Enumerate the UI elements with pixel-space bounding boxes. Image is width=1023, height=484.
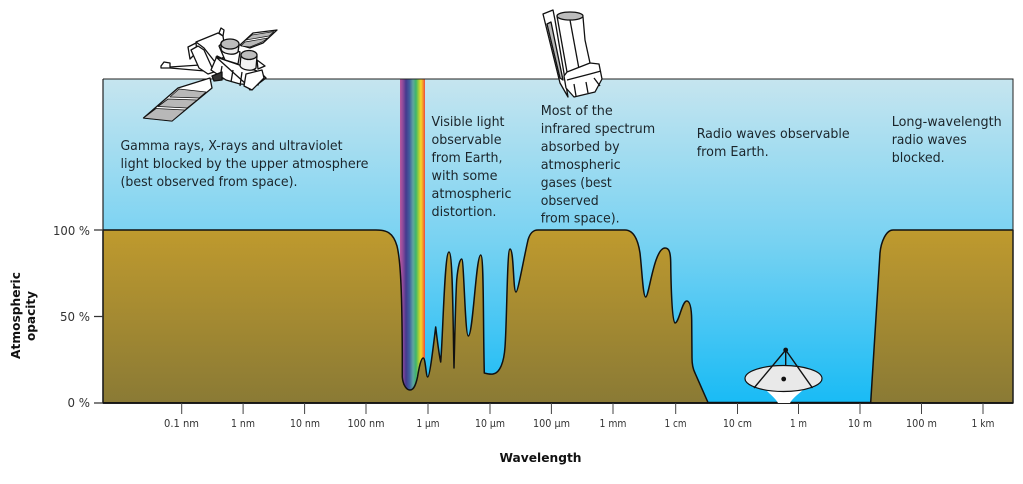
text: infrared spectrum: infrared spectrum [541,121,655,137]
x axis ticks and wavelength labels: 1 nm [231,417,255,430]
sky background panel [103,79,1013,403]
text: infrared spectrum: from space). [541,210,620,226]
text: infrared spectrum: absorbed by [541,139,620,155]
y axis title: Atmospheric [8,272,23,359]
x axis ticks and wavelength labels: 10 µm [475,417,505,430]
y axis title: opacity [23,291,38,341]
y axis ticks and labels: 50 % [60,309,90,324]
text: long-wavelength radio waves [892,114,1002,166]
x axis ticks and wavelength labels: 1 cm [664,417,686,430]
text: infrared spectrum: Most of the [541,103,613,119]
text: visible light: atmospheric [432,186,512,202]
visible light rainbow band [400,79,425,399]
x axis ticks and wavelength labels: 10 cm [723,417,752,430]
x axis ticks and wavelength labels: 10 m [848,417,872,430]
plot frame [103,79,1013,403]
x axis ticks and wavelength labels: 100 µm [533,417,570,430]
x axis ticks and wavelength labels [164,403,994,430]
icon: infrared space telescope [543,10,602,97]
text: long-wavelength radio waves: blocked. [892,150,945,166]
text: visible light: from Earth, [432,150,502,166]
text: infrared spectrum: observed [541,193,599,209]
x axis ticks and wavelength labels: 1 km [972,417,994,430]
x axis ticks and wavelength labels: 1 µm [416,417,440,430]
y axis ticks and labels: 100 % [53,223,90,238]
text: radio waves [697,126,850,160]
text: gamma rays, x-rays and ultraviolet: light blocked by the upper atmosphere [120,156,368,172]
icon: radio telescope dish [745,348,822,403]
text: visible light: distortion. [432,204,496,220]
text: radio waves: from Earth. [697,144,769,160]
x axis title: Wavelength [500,450,582,465]
y axis ticks and labels [53,223,103,410]
x axis ticks and wavelength labels: 100 nm [348,417,384,430]
x axis ticks and wavelength labels: 0.1 nm [164,417,199,430]
text: gamma rays, x-rays and ultraviolet: (best observed from space). [120,174,298,190]
text: long-wavelength radio waves: Long-wavelength [892,114,1002,130]
x axis ticks and wavelength labels: 1 m [790,417,807,430]
text: visible light: Visible light [432,114,504,130]
text: gamma rays, x-rays and ultraviolet: Gamma rays, X-rays and ultraviolet [120,138,342,154]
text: infrared spectrum: atmospheric [541,157,621,173]
text: visible light: observable [432,132,502,148]
text: infrared spectrum [541,103,655,226]
text: visible light [432,114,512,220]
text: long-wavelength radio waves: radio waves [892,132,967,148]
text: infrared spectrum: gases (best [541,175,612,191]
text: gamma rays, x-rays and ultraviolet [120,138,368,190]
icon: gamma-ray / x-ray satellite [144,28,277,121]
text: visible light: with some [432,168,498,184]
y axis ticks and labels: 0 % [68,395,90,410]
text: radio waves: Radio waves observable [697,126,850,142]
x axis ticks and wavelength labels: 1 mm [600,417,626,430]
opacity curve area [103,230,1013,403]
y axis title [8,272,38,359]
x axis ticks and wavelength labels: 10 nm [290,417,320,430]
x axis ticks and wavelength labels: 100 m [906,417,937,430]
